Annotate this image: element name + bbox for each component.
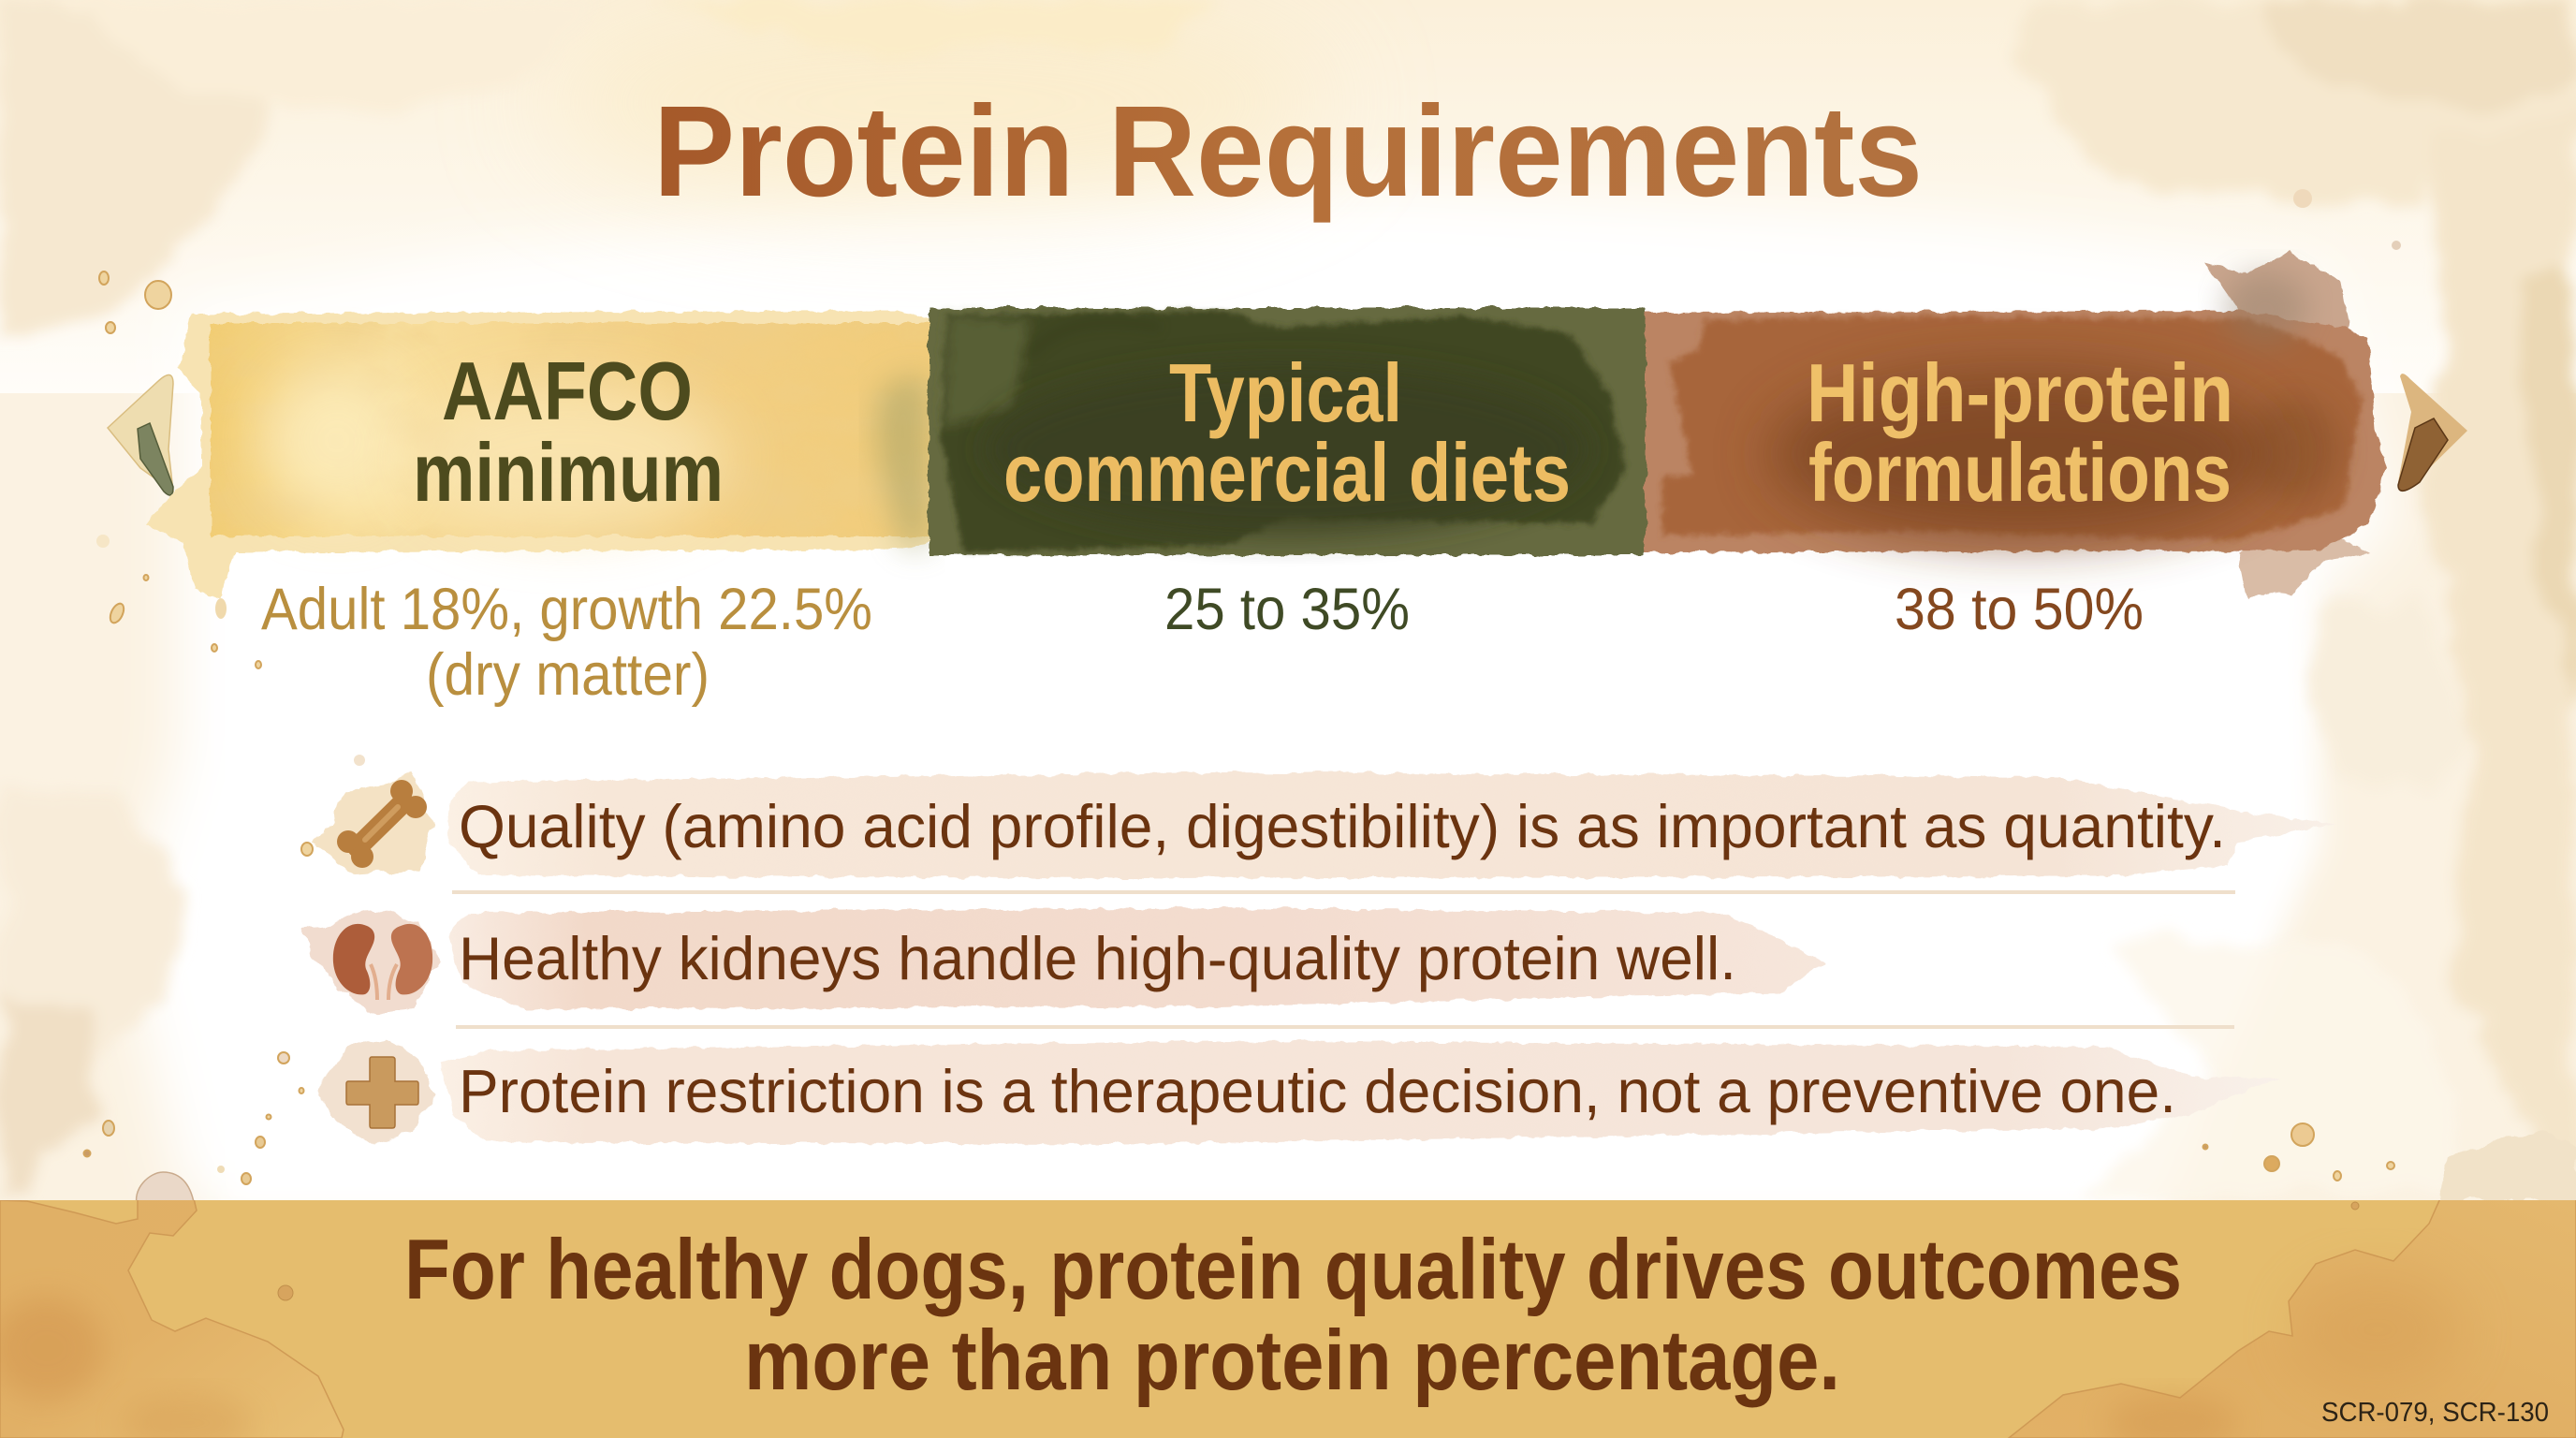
swatch: olive wash — [929, 308, 1646, 555]
bullet: healthy kidneys — [301, 908, 1825, 1013]
conclusion text: more than protein percentage. — [744, 1313, 1840, 1408]
text: Quality (amino acid profile, digestibility) is as important as quantity. — [459, 792, 2226, 860]
swatch: brown wash — [1646, 251, 2387, 599]
panel: High-protein formulations — [1646, 251, 2387, 599]
heading: commercial diets — [1003, 426, 1571, 519]
heading: AAFCO — [442, 345, 693, 437]
corner stains — [0, 1200, 2576, 1438]
brush strip — [447, 772, 2335, 878]
heading: formulations — [1808, 426, 2232, 519]
brush strip — [440, 1041, 2279, 1144]
conclusion text: For healthy dogs, protein quality drives outcomes — [404, 1223, 2182, 1317]
value: high-protein formulations: 38 to 50% — [1895, 577, 2144, 642]
heading: minimum — [413, 426, 724, 519]
value: typical commercial diets: 25 to 35% — [1164, 577, 1410, 642]
value: AAFCO minimum: Adult 18%, growth 22.5% — [261, 577, 872, 642]
bullet: protein restriction — [316, 1039, 2279, 1147]
brush strip — [447, 908, 1825, 1009]
panel: conclusion band — [0, 1172, 2576, 1438]
arrow: previous — [108, 374, 173, 495]
divider — [452, 890, 2235, 894]
value: AAFCO minimum — [261, 577, 872, 708]
divider — [456, 1025, 2234, 1029]
swatch: yellow wash — [145, 311, 931, 599]
heading: High-protein — [1807, 346, 2233, 439]
icon: medical cross — [316, 1039, 435, 1147]
panel: Typical commercial diets — [929, 308, 1646, 555]
title: Protein Requirements — [653, 80, 1923, 224]
heading: Typical — [1169, 346, 1402, 439]
scattered paint droplets — [84, 189, 2401, 1184]
source reference: SCR-079, SCR-130 — [2321, 1398, 2549, 1428]
text: Protein restriction is a therapeutic decision, not a preventive one. — [459, 1057, 2176, 1125]
arrow: next — [2398, 374, 2467, 491]
value: AAFCO minimum: (dry matter) — [426, 642, 710, 708]
bullet: protein quality — [316, 772, 2335, 878]
band background — [0, 1200, 2576, 1438]
icon: bone — [316, 772, 432, 875]
panel: AAFCO minimum — [145, 311, 931, 599]
icon: kidneys — [301, 910, 440, 1013]
text: Healthy kidneys handle high-quality protein well. — [459, 924, 1736, 992]
